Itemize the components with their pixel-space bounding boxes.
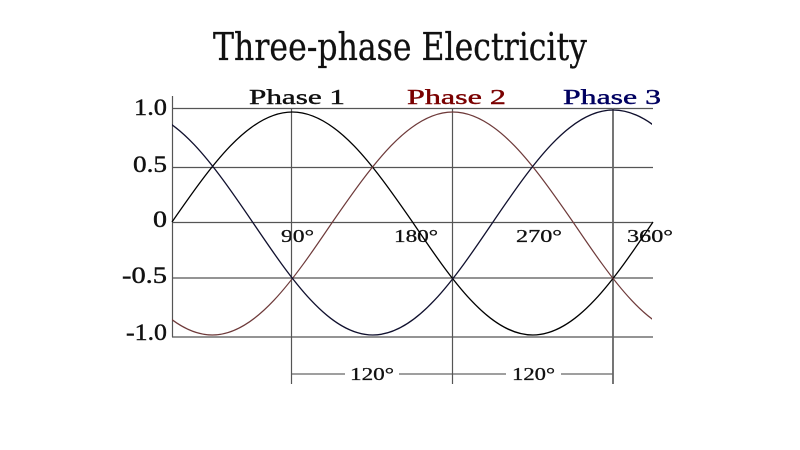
phase 3 wave <box>172 109 652 336</box>
degree labels <box>281 226 673 246</box>
120 degree span: phase 1 to phase 2: 120° <box>350 364 394 384</box>
infographic canvas <box>122 30 672 384</box>
y axis labels: 1.0 <box>134 95 167 120</box>
title: Three-phase Electricity <box>213 25 587 69</box>
y axis labels: -1.0 <box>126 320 167 345</box>
degree labels: 270° <box>516 226 562 246</box>
y axis labels: -0.5 <box>122 263 167 288</box>
phase 2 wave <box>172 111 652 336</box>
y axis labels <box>122 95 167 345</box>
degree labels: 90° <box>281 226 314 246</box>
degree labels: 180° <box>394 226 438 246</box>
phase labels: Phase 1 <box>249 85 345 109</box>
phase labels <box>249 85 661 109</box>
phase labels: Phase 2 <box>407 85 506 109</box>
degree labels: 360° <box>627 226 673 246</box>
y axis labels: 0.5 <box>133 152 167 177</box>
y axis labels: 0 <box>153 207 167 232</box>
120 degree span: phase 2 to phase 3: 120° <box>512 364 555 384</box>
phase labels: Phase 3 <box>563 85 661 109</box>
chart grid <box>172 96 653 384</box>
phase 1 wave <box>172 112 653 335</box>
